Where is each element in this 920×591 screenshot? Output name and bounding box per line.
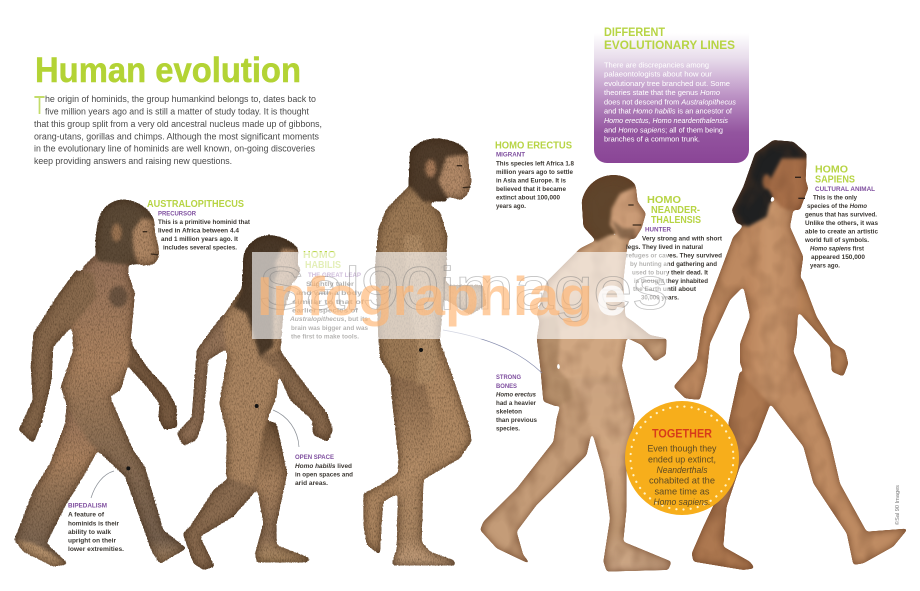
- panel heading: EVOLUTIONARY LINES: [604, 40, 735, 52]
- label: Homo sapiens: [804, 164, 878, 270]
- watermark: [252, 252, 668, 339]
- callout: open space: [273, 410, 353, 487]
- callout: strong bones: BONES: [496, 383, 517, 390]
- bent leg: [363, 342, 472, 555]
- panel body: does not descend from Australopithecus: [604, 98, 736, 106]
- label: Homo sapiens: able to create an artistic: [805, 229, 878, 236]
- label: Homo erectus: HOMO ERECTUS: [495, 140, 572, 152]
- forward arm: [573, 282, 667, 362]
- hair: [233, 235, 298, 357]
- panel body: palaeontologists about how our: [604, 70, 712, 78]
- panel background: [594, 12, 749, 163]
- near arm: [18, 270, 97, 443]
- label: Homo habilis: and with a body: [296, 290, 362, 297]
- label: Homo sapiens: Unlike the others, it was: [805, 220, 878, 227]
- callout: together: same time as: [654, 486, 710, 498]
- far arm: [257, 350, 333, 442]
- panel body: branches of a common trunk.: [604, 134, 700, 144]
- label: Homo habilis: earlier species of: [292, 308, 359, 314]
- panel: different evolutionary lines: [594, 12, 749, 163]
- label: Homo sapiens: appeared 150,000: [811, 254, 865, 261]
- face: [610, 187, 646, 239]
- label: Homo neanderthalensis: is thought they inhabited: [634, 278, 708, 285]
- hanging arm and hand: [403, 235, 438, 385]
- near arm: [673, 223, 757, 400]
- label: Homo erectus: million years ago to settle: [496, 169, 573, 176]
- panel body: There are discrepancies among: [604, 60, 709, 70]
- standing leg: [390, 372, 457, 566]
- panel body: and Homo sapiens; all of them being: [604, 126, 723, 134]
- leader line: [91, 471, 114, 498]
- label: Australopithecus: AUSTRALOPITHECUS: [147, 198, 244, 210]
- callout: together: ended up extinct,: [648, 454, 716, 466]
- callout: open space: OPEN SPACE: [295, 454, 334, 461]
- label: Homo habilis: HABILIS: [305, 259, 341, 271]
- badge circle: [625, 401, 739, 515]
- callout: together: Neanderthals: [656, 465, 708, 476]
- callout: together: Even though they: [648, 444, 717, 455]
- label: Australopithecus: includes several species.: [163, 244, 237, 252]
- ear: [112, 224, 122, 242]
- label: Australopithecus: This is a primitive hominid that: [158, 219, 251, 226]
- dotted ring: [630, 406, 734, 510]
- label: Homo sapiens: world full of symbols.: [804, 237, 869, 244]
- label: Homo sapiens: species of the Homo: [807, 203, 867, 210]
- panel heading: DIFFERENT: [604, 27, 665, 39]
- callout: open space: arid areas.: [295, 480, 328, 487]
- ear: [763, 174, 771, 189]
- near arm: [177, 313, 230, 446]
- watermark band: [252, 252, 668, 339]
- intro text block: that this group split from a very old ancestral nucleus made up of gibbons,: [34, 118, 322, 129]
- label: Homo erectus: years ago.: [496, 203, 526, 210]
- label: Homo neanderthalensis: refuges or caves. They survived: [626, 252, 722, 260]
- leader line: [443, 330, 542, 373]
- figure: Homo sapiens: [673, 140, 908, 570]
- drop cap: T: [34, 90, 45, 120]
- callout: bipedalism: A feature of: [68, 512, 105, 519]
- label: Homo sapiens: genus that has survived.: [805, 212, 877, 219]
- callout: bipedalism: lower extremities.: [68, 546, 124, 553]
- callout: strong bones: STRONG: [496, 374, 521, 381]
- label: Homo neanderthalensis: HUNTER: [645, 227, 672, 234]
- label: Homo habilis: the first to make tools.: [291, 334, 359, 340]
- panel body: Homo erectus, Homo neardenthalensis: [604, 116, 728, 125]
- marker dot: [419, 348, 423, 352]
- callout: together: Homo sapiens.: [654, 497, 710, 508]
- forward arm: [407, 235, 487, 315]
- label: Australopithecus: and 1 million years ago. It: [161, 236, 239, 243]
- label: Australopithecus: lived in Africa between 4.4: [158, 228, 239, 234]
- label: Homo habilis: Australopithecus, but its: [289, 316, 368, 323]
- intro text block: five million years ago and is still a matter of study today. It is thought: [45, 106, 309, 116]
- callout: bipedalism: [68, 471, 124, 553]
- label: Homo habilis: brain was bigger and was: [291, 325, 368, 332]
- label: Homo neanderthalensis: legs. They lived in natural: [626, 244, 703, 251]
- eye and mouth: [628, 205, 641, 225]
- face: [133, 218, 159, 266]
- label: Homo sapiens: HOMO: [815, 164, 848, 176]
- label: Homo erectus: This species left Africa 1.8: [496, 161, 574, 168]
- label: Homo erectus: in Asia and Europe. It is: [496, 178, 566, 184]
- beard: [612, 220, 635, 239]
- leader line: [273, 410, 299, 447]
- near arm and fist: [537, 315, 573, 407]
- label: Homo neanderthalensis: [626, 194, 723, 302]
- callout: together: [625, 401, 739, 515]
- label: Homo neanderthalensis: the Earth until about: [633, 286, 697, 293]
- label: Homo neanderthalensis: HOMO: [647, 194, 681, 206]
- hair: [582, 175, 636, 242]
- back leg: [692, 370, 770, 570]
- orange watermark text: Infographiag: [257, 265, 593, 327]
- intro text block: in the evolutionary line of hominids are well known, on-going discoveries: [34, 143, 315, 154]
- label: Homo erectus: MIGRANT: [496, 152, 525, 159]
- head: [408, 138, 468, 202]
- label: Homo habilis: THE GREAT LEAP: [308, 272, 361, 279]
- label: Homo habilis: HOMO: [303, 249, 336, 261]
- label: Homo erectus: believed that it became: [496, 186, 566, 193]
- rear leg and foot: [14, 403, 100, 567]
- label: Homo habilis: [289, 249, 368, 340]
- callout: strong bones: Homo erectus: [496, 392, 536, 399]
- callout: strong bones: skeleton: [496, 409, 522, 416]
- ear: [425, 159, 436, 177]
- label: Homo neanderthalensis: by hunting and gathering and: [630, 261, 717, 268]
- label: Homo neanderthalensis: Very strong and with short: [642, 236, 723, 243]
- label: Homo neanderthalensis: THALENSIS: [651, 214, 701, 226]
- label: Homo sapiens: years ago.: [810, 262, 840, 270]
- callout: strong bones: than previous: [496, 417, 537, 424]
- figure: Homo habilis: [177, 235, 333, 570]
- far arm: [128, 337, 177, 430]
- eye and mouth: [143, 232, 158, 255]
- label: Australopithecus: [147, 198, 251, 252]
- callout: open space: Homo habilis lived: [295, 463, 352, 470]
- panel body: and that Homo habilis is an ancestor of: [604, 106, 733, 116]
- label: Homo neanderthalensis: 30,000 years.: [641, 294, 679, 302]
- label: Homo sapiens: CULTURAL ANIMAL: [815, 186, 875, 193]
- panel body: evolutionary tree branched out. Some: [604, 79, 730, 88]
- rear leg: [183, 457, 258, 570]
- panel body: theories state that the genus Homo: [604, 88, 721, 97]
- panel heading: [604, 27, 735, 52]
- marker dot: [255, 404, 259, 408]
- callout: open space: in open spaces and: [295, 472, 353, 478]
- chest patch: [109, 286, 128, 307]
- lead leg: [567, 358, 672, 572]
- eye and mouth: [457, 166, 471, 188]
- callout: together: TOGETHER: [652, 429, 713, 441]
- label: Homo habilis: similar to that of: [292, 299, 365, 306]
- face: [275, 248, 301, 282]
- intro text block: he origin of hominids, the group humankind belongs to, dates back to: [45, 93, 316, 104]
- forward arm: [797, 277, 848, 377]
- label: Homo neanderthalensis: NEANDER-: [651, 204, 700, 216]
- rear leg: [480, 358, 593, 565]
- torso: [537, 235, 630, 378]
- figure: Homo erectus: [363, 138, 487, 566]
- label: Australopithecus: PRECURSOR: [158, 211, 197, 218]
- callout: bipedalism: ability to walk: [68, 529, 111, 536]
- foot: [15, 539, 68, 567]
- face: [438, 154, 472, 200]
- image credit: ©Sal 90 Images: [894, 484, 901, 525]
- label: Homo erectus: extinct about 100,000: [496, 194, 560, 202]
- marker dot: [126, 466, 130, 470]
- callout: bipedalism: hominids is their: [68, 520, 119, 528]
- lead leg: [747, 352, 908, 565]
- label: Homo neanderthalensis: used to bury their dead. It: [632, 270, 709, 276]
- callout: strong bones: species.: [496, 426, 520, 432]
- intro text block: keep providing answers and raising new questions.: [34, 155, 232, 166]
- figure: Homo neanderthalensis: [480, 175, 672, 572]
- label: Homo sapiens: This is the only: [813, 194, 857, 202]
- lead leg: [255, 420, 311, 563]
- figure: Australopithecus: [14, 199, 187, 567]
- intro text block: orang-utans, gorillas and chimps. Although the most significant moments: [34, 130, 319, 141]
- label: Homo habilis: Slightly taller: [306, 281, 355, 288]
- eye and mouth: [795, 177, 805, 198]
- callout: strong bones: had a heavier: [496, 400, 536, 407]
- white watermark letter: e: [596, 265, 627, 327]
- torso and lead leg: [61, 253, 187, 564]
- label: Homo sapiens: Homo sapiens first: [810, 246, 865, 252]
- outlined watermark text: Sal90images: [258, 255, 668, 322]
- long hair: [732, 140, 807, 227]
- callout: together: cohabited at the: [649, 476, 715, 486]
- callout: bipedalism: upright on their: [68, 538, 116, 544]
- torso: [732, 200, 807, 403]
- panel body: [604, 60, 736, 144]
- face: [767, 158, 808, 210]
- label: Homo sapiens: SAPIENS: [815, 173, 855, 185]
- title: Human evolution: [35, 50, 301, 90]
- head: [95, 199, 159, 266]
- label: Homo erectus: [495, 140, 574, 210]
- torso: [375, 187, 447, 383]
- intro text block: [34, 90, 322, 166]
- torso: [219, 270, 293, 487]
- callout: bipedalism: BIPEDALISM: [68, 503, 107, 510]
- callout: strong bones: [443, 330, 542, 432]
